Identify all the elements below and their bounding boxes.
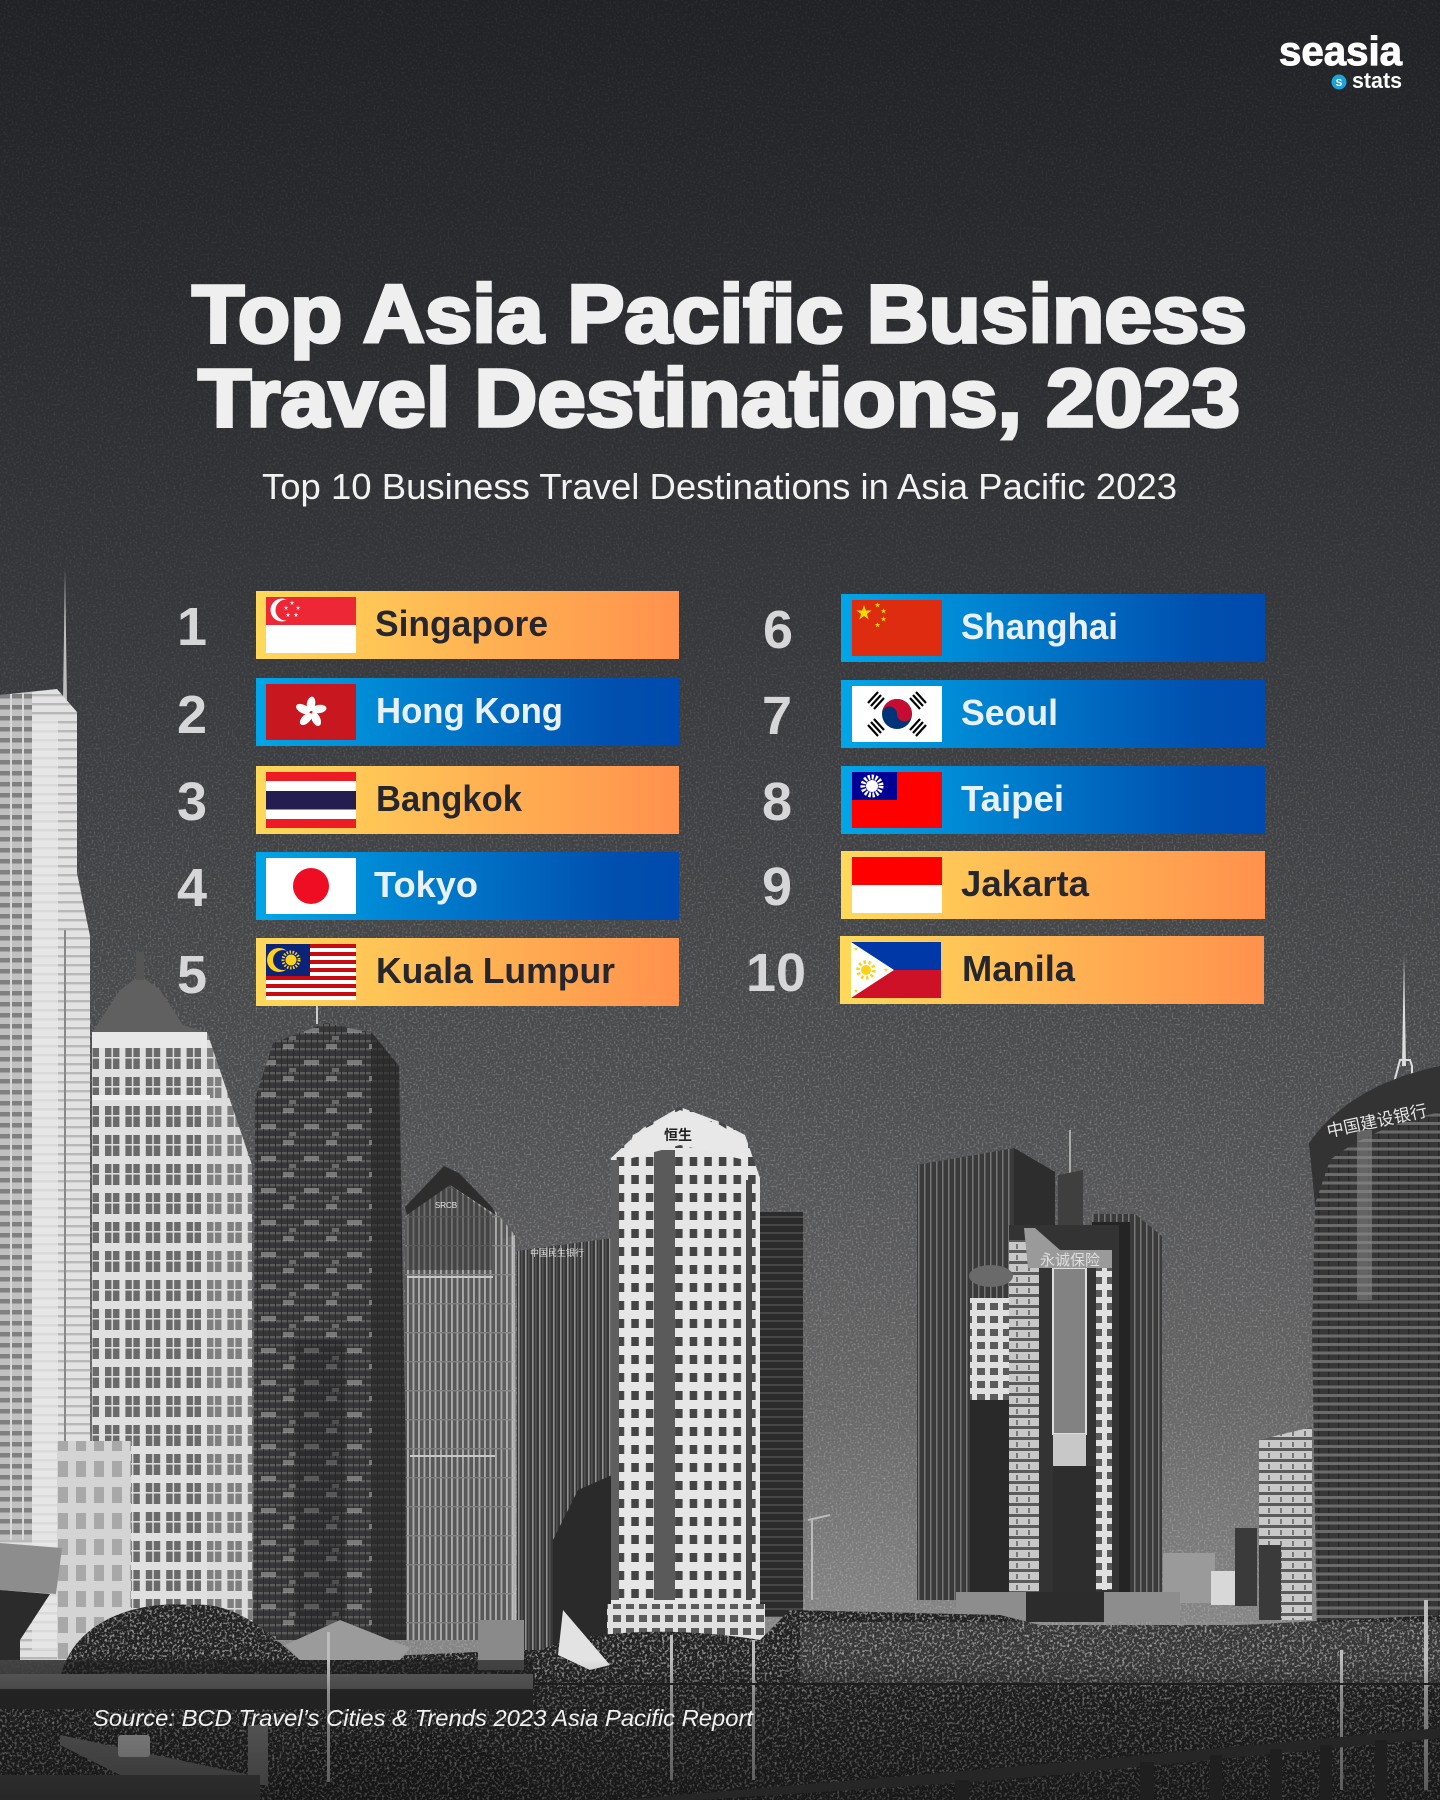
ground: lower road and shrubs bbox=[0, 1725, 545, 1800]
row 10: Manila bbox=[746, 936, 1264, 1004]
row 10: Manila: 10 bbox=[746, 943, 806, 1003]
title: Top Asia Pacific Business bbox=[192, 269, 1247, 360]
row 1: Singapore bbox=[177, 591, 679, 659]
building: dark glass tower bbox=[253, 1000, 409, 1640]
title bbox=[192, 269, 1247, 444]
ranking: right column bbox=[746, 594, 1265, 1004]
row 4: Tokyo: Tokyo bbox=[374, 864, 478, 905]
building: right dark tower behind Hang Seng bbox=[760, 1212, 803, 1617]
row 6: Shanghai: 6 bbox=[763, 600, 793, 660]
row 8: Taipei: Taipei bbox=[961, 778, 1064, 819]
row 5: Kuala Lumpur: 5 bbox=[177, 945, 207, 1005]
row 6: Shanghai: Shanghai bbox=[961, 606, 1118, 647]
building: SRCB tower: SRCB bbox=[435, 1201, 457, 1210]
building: far-left tower bbox=[0, 568, 90, 1660]
row 2: Hong Kong: Hong Kong bbox=[376, 690, 563, 731]
logo: seasia stats: stats bbox=[1352, 68, 1402, 93]
ground: elevated walkway bbox=[0, 1660, 533, 1709]
ground shading bbox=[0, 1660, 1440, 1800]
row 7: Seoul bbox=[762, 680, 1265, 748]
row 1: Singapore: 1 bbox=[177, 597, 207, 657]
logo: seasia stats: S bbox=[1336, 78, 1343, 89]
row 9: Jakarta: 9 bbox=[762, 857, 792, 917]
building: construction bank round tower bbox=[1309, 953, 1440, 1640]
building: white grid tower bbox=[92, 952, 252, 1640]
row 4: Tokyo: 4 bbox=[177, 858, 207, 918]
ranking: left column bbox=[177, 591, 679, 1006]
title: Travel Destinations, 2023 bbox=[198, 353, 1240, 444]
ground: tree line bbox=[0, 1604, 1440, 1800]
row 6: Shanghai bbox=[763, 594, 1265, 662]
building: centre twin complex bbox=[917, 1130, 1180, 1622]
row 10: Manila: Manila bbox=[962, 948, 1076, 989]
building: rear bank tower bbox=[517, 1238, 612, 1650]
source note: Source: BCD Travel’s Cities & Trends 2023 Asia Pacific Report bbox=[93, 1705, 755, 1731]
row 7: Seoul: 7 bbox=[762, 686, 792, 746]
pavilion roofs bbox=[285, 1610, 610, 1670]
row 1: Singapore: Singapore bbox=[375, 603, 548, 644]
building: canopy bbox=[0, 1543, 62, 1660]
row 8: Taipei: 8 bbox=[762, 772, 792, 832]
row 3: Bangkok: 3 bbox=[177, 772, 207, 832]
row 4: Tokyo bbox=[177, 852, 679, 920]
subtitle: Top 10 Business Travel Destinations in Asia Pacific 2023 bbox=[262, 466, 1177, 507]
row 8: Taipei bbox=[762, 766, 1265, 834]
railing in the foreground bbox=[533, 1683, 1440, 1800]
row 7: Seoul: Seoul bbox=[961, 692, 1058, 733]
city skyline photo bbox=[0, 568, 1440, 1800]
building: Hang Seng tower: 恒生 bbox=[664, 1127, 692, 1143]
row 3: Bangkok bbox=[177, 766, 679, 834]
logo: seasia stats: seasia bbox=[1279, 28, 1403, 74]
row 5: Kuala Lumpur bbox=[177, 938, 679, 1006]
building: construction bank round tower: 中国建设银行 bbox=[1325, 1101, 1429, 1141]
row 5: Kuala Lumpur: Kuala Lumpur bbox=[376, 950, 615, 991]
row 9: Jakarta: Jakarta bbox=[961, 863, 1090, 904]
row 2: Hong Kong: 2 bbox=[177, 685, 207, 745]
building: Hang Seng tower bbox=[607, 1107, 765, 1650]
building: low annex bbox=[57, 1441, 131, 1659]
building: rear bank tower: 中国民生银行 bbox=[530, 1247, 584, 1258]
row 9: Jakarta bbox=[762, 851, 1265, 919]
crane bbox=[808, 1515, 830, 1600]
building: centre twin complex: 永诚保险 bbox=[1040, 1252, 1100, 1269]
building: low blocks behind the trees bbox=[1163, 1427, 1312, 1620]
row 3: Bangkok: Bangkok bbox=[376, 778, 523, 819]
lamp posts bbox=[327, 1600, 1428, 1790]
building: SRCB tower bbox=[405, 1166, 516, 1640]
row 2: Hong Kong bbox=[177, 678, 679, 746]
